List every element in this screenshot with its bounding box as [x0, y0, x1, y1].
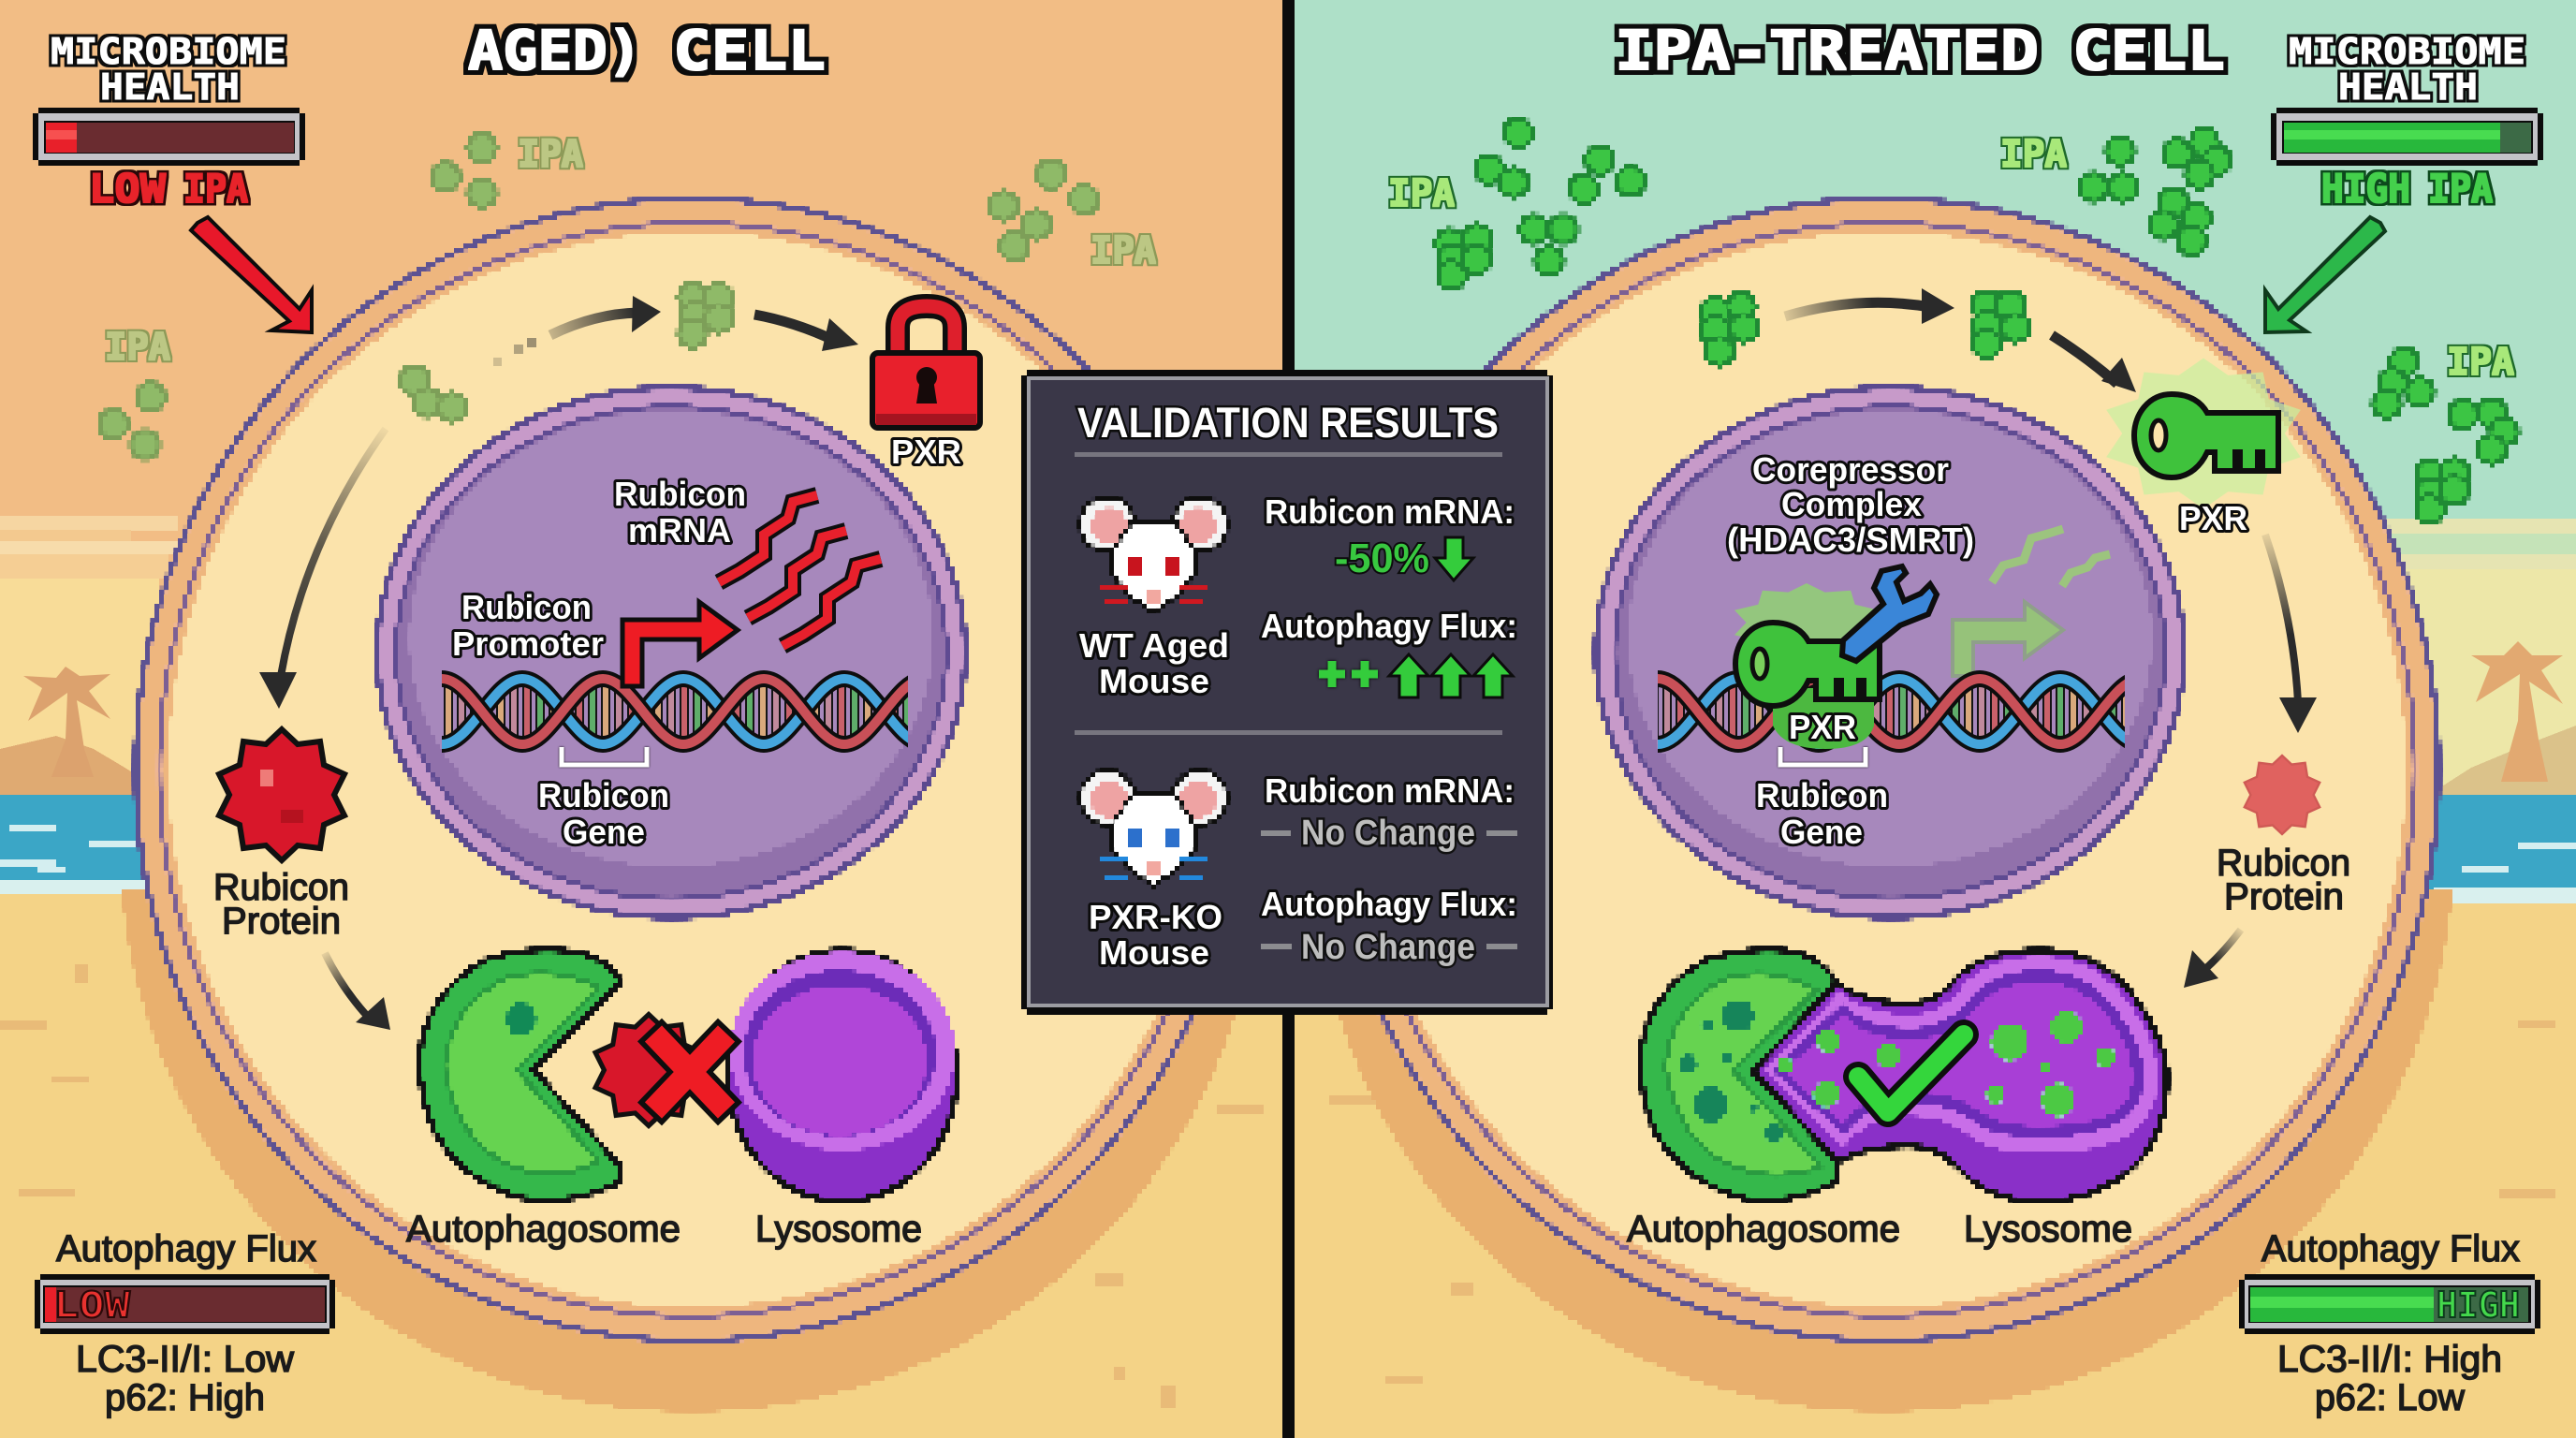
label: Rubicon Promoter: Rubicon [461, 588, 592, 626]
palm tree left [23, 667, 110, 777]
lysosome [728, 950, 957, 1201]
heading: MICROBIOME [2289, 31, 2525, 72]
arrow: protein to fused vesicle [2184, 930, 2241, 988]
label: Rubicon Gene: Gene [1780, 813, 1863, 851]
nucleus [1596, 388, 2184, 917]
KO Autophagy Flux result: Autophagy Flux: [1261, 885, 1517, 923]
label: Corepressor complex: Complex [1781, 485, 1922, 523]
icon: blue wrench [1842, 566, 1937, 661]
label: PXR: PXR [891, 433, 961, 471]
label: Rubicon Gene: Rubicon [1756, 776, 1888, 814]
cell body with membrane [1312, 198, 2454, 1412]
KO Rubicon mRNA result [1261, 771, 1517, 853]
gene bracket [562, 747, 647, 765]
center divider [1282, 0, 1295, 1438]
stats: p62: High [105, 1377, 265, 1418]
title: aged cell: AGED) [468, 19, 642, 82]
icon: green check [1858, 1034, 1964, 1112]
label: Rubicon Protein [213, 867, 349, 942]
left autophagy flux meter [35, 1228, 335, 1418]
IPA labels: IPA [2447, 341, 2514, 384]
label: WT aged mouse: WT Aged [1079, 626, 1229, 665]
IPA labels faded [105, 133, 1156, 369]
stats: LC3-II/I: Low [76, 1339, 294, 1380]
panel heading: VALIDATION RESULTS [1077, 399, 1499, 447]
label: Autophagosome: Autophagosome [1627, 1209, 1900, 1250]
DNA helix [1658, 679, 2141, 744]
IPA labels [1388, 133, 2514, 384]
heading: HEALTH [2338, 66, 2478, 108]
arrow: down to Rubicon protein [259, 429, 386, 709]
IPA molecules outside [1436, 119, 2518, 523]
label: PXR-KO mouse: PXR-KO [1089, 898, 1222, 936]
autolysosome purple part [1752, 950, 2167, 1201]
IPA labels faded: IPA [105, 326, 170, 369]
KO Autophagy Flux result [1261, 885, 1517, 967]
blocked protein [595, 1015, 702, 1125]
flux bar high [2239, 1274, 2540, 1334]
panel frame [1021, 370, 1553, 1015]
flux bar low: LOW [53, 1284, 130, 1326]
glow behind key [2106, 358, 2301, 509]
heading [51, 31, 286, 108]
title: IPA-treated cell: IPA-TREATED [1615, 19, 2039, 82]
arrow: IPA to PXR key [2052, 335, 2136, 392]
icon: Rubicon protein [219, 729, 344, 860]
label: Rubicon Protein: Protein [222, 901, 341, 942]
IPA labels faded: IPA [518, 133, 583, 176]
WT Autophagy Flux result [1261, 607, 1517, 697]
arrow: down to protein [2265, 535, 2317, 733]
IPA molecules inside cell [1701, 291, 2029, 365]
title: IPA-treated cell [1615, 19, 2225, 82]
right autophagy flux meter [2239, 1228, 2540, 1418]
KO Rubicon mRNA result: Rubicon mRNA: [1265, 771, 1515, 810]
label: Rubicon mRNA [614, 475, 746, 550]
autophagosome [419, 949, 621, 1201]
label: Lysosome: Lysosome [755, 1209, 922, 1250]
label: Rubicon Protein [2217, 843, 2350, 917]
label: Autophagosome: Autophagosome [406, 1209, 681, 1250]
KO Rubicon mRNA result: No Change [1301, 814, 1475, 853]
WT Rubicon mRNA result: -50% [1335, 536, 1429, 581]
panel: validation results [1021, 370, 1553, 1015]
label: LOW IPA [89, 166, 248, 212]
title: aged cell: CELL [673, 19, 826, 82]
label: Autophagy Flux: Autophagy Flux [2261, 1228, 2520, 1269]
stats [2277, 1339, 2502, 1418]
label: LOW IPA: LOW [89, 166, 167, 212]
sand specks [0, 964, 2555, 1408]
label: Rubicon Protein: Rubicon [213, 867, 349, 908]
label: LOW IPA: IPA [183, 166, 248, 212]
mRNA squiggles [719, 495, 881, 646]
IPA faded molecules outside [99, 134, 1098, 459]
heading [2289, 31, 2525, 108]
icon: red lock [872, 306, 980, 428]
left microbiome health meter [33, 31, 305, 212]
icon: green key [2134, 394, 2278, 477]
arrow: IPA to PXR lock [754, 315, 858, 351]
IPA-treated cell [1312, 119, 2518, 1412]
aged cell [99, 133, 1262, 1412]
arrow: high IPA green [2265, 217, 2385, 332]
arrow: IPA entering [493, 296, 661, 366]
label: Corepressor complex: (HDAC3/SMRT) [1727, 521, 1974, 559]
promoter arrow red [622, 602, 738, 686]
icon: red X [650, 1030, 730, 1114]
label: Rubicon Gene [538, 776, 669, 851]
WT Rubicon mRNA result [1265, 492, 1515, 581]
arrow: Protein to autophagosome [325, 953, 390, 1030]
heading: MICROBIOME [51, 31, 286, 72]
label: Rubicon mRNA: mRNA [628, 511, 731, 550]
IPA labels: IPA [1388, 172, 1455, 215]
label: Rubicon mRNA: Rubicon [614, 475, 746, 513]
IPA labels: IPA [2000, 133, 2067, 176]
WT Autophagy Flux result: Autophagy Flux: [1261, 607, 1517, 645]
stats: p62: Low [2315, 1377, 2465, 1418]
DNA helix [442, 679, 925, 744]
IPA labels faded: IPA [1090, 229, 1156, 272]
label: Rubicon Gene: Rubicon [538, 776, 669, 814]
label: Rubicon Protein: Rubicon [2217, 843, 2350, 884]
PXR-KO mouse icon [1080, 770, 1227, 886]
health bar high [2271, 108, 2543, 166]
WT aged mouse icon [1080, 497, 1227, 612]
label: PXR-KO mouse [1089, 898, 1222, 972]
stats: LC3-II/I: High [2277, 1339, 2502, 1380]
label: Autophagy Flux: Autophagy Flux [56, 1228, 316, 1269]
faded promoter arrow [1953, 602, 2063, 676]
heading: HEALTH [100, 66, 240, 108]
title: aged cell [468, 19, 826, 82]
flux bar low [35, 1274, 335, 1334]
icon: faded Rubicon protein [2245, 756, 2320, 834]
label: HIGH IPA: IPA [2428, 166, 2493, 212]
IPA faded molecules inside cell [401, 284, 733, 421]
autolysosome green part [1640, 949, 1837, 1201]
cell body with membrane [120, 198, 1262, 1412]
gene bracket [1780, 747, 1866, 765]
faded mRNA squiggles [1992, 529, 2110, 586]
arrow: low IPA red [191, 217, 312, 332]
bound PXR glow [1734, 583, 1879, 662]
stats [76, 1339, 294, 1418]
label: Rubicon Protein: Protein [2224, 876, 2344, 917]
label: HIGH IPA [2321, 166, 2493, 212]
label: Rubicon Gene [1756, 776, 1888, 851]
background: treated side beach [1295, 0, 2576, 1438]
label: Rubicon Promoter [452, 588, 604, 663]
bound PXR blob [1773, 688, 1874, 749]
label: PXR-KO mouse: Mouse [1099, 933, 1209, 972]
label: Corepressor complex [1727, 450, 1974, 559]
background: aged side beach [0, 0, 1282, 1438]
flux bar high: HIGH [2437, 1284, 2520, 1326]
label: WT aged mouse [1079, 626, 1229, 700]
nucleus [377, 388, 965, 917]
label: PXR on DNA: PXR [1789, 708, 1856, 746]
right microbiome health meter [2271, 31, 2543, 212]
label: PXR: PXR [2179, 499, 2247, 537]
label: WT aged mouse: Mouse [1099, 662, 1209, 700]
icon: bound green key [1735, 623, 1880, 706]
KO Autophagy Flux result: No Change [1301, 928, 1475, 967]
label: Rubicon Gene: Gene [563, 813, 645, 851]
arrow: IPA moving [1785, 288, 1954, 324]
title: IPA-treated cell: CELL [2072, 19, 2225, 82]
label: Rubicon Promoter: Promoter [452, 624, 604, 663]
label: HIGH IPA: HIGH [2321, 166, 2410, 212]
WT Rubicon mRNA result: Rubicon mRNA: [1265, 492, 1515, 531]
palm tree right [2471, 641, 2563, 782]
health bar low [33, 108, 305, 166]
label: Corepressor complex: Corepressor [1752, 450, 1949, 489]
label: Lysosome: Lysosome [1964, 1209, 2132, 1250]
